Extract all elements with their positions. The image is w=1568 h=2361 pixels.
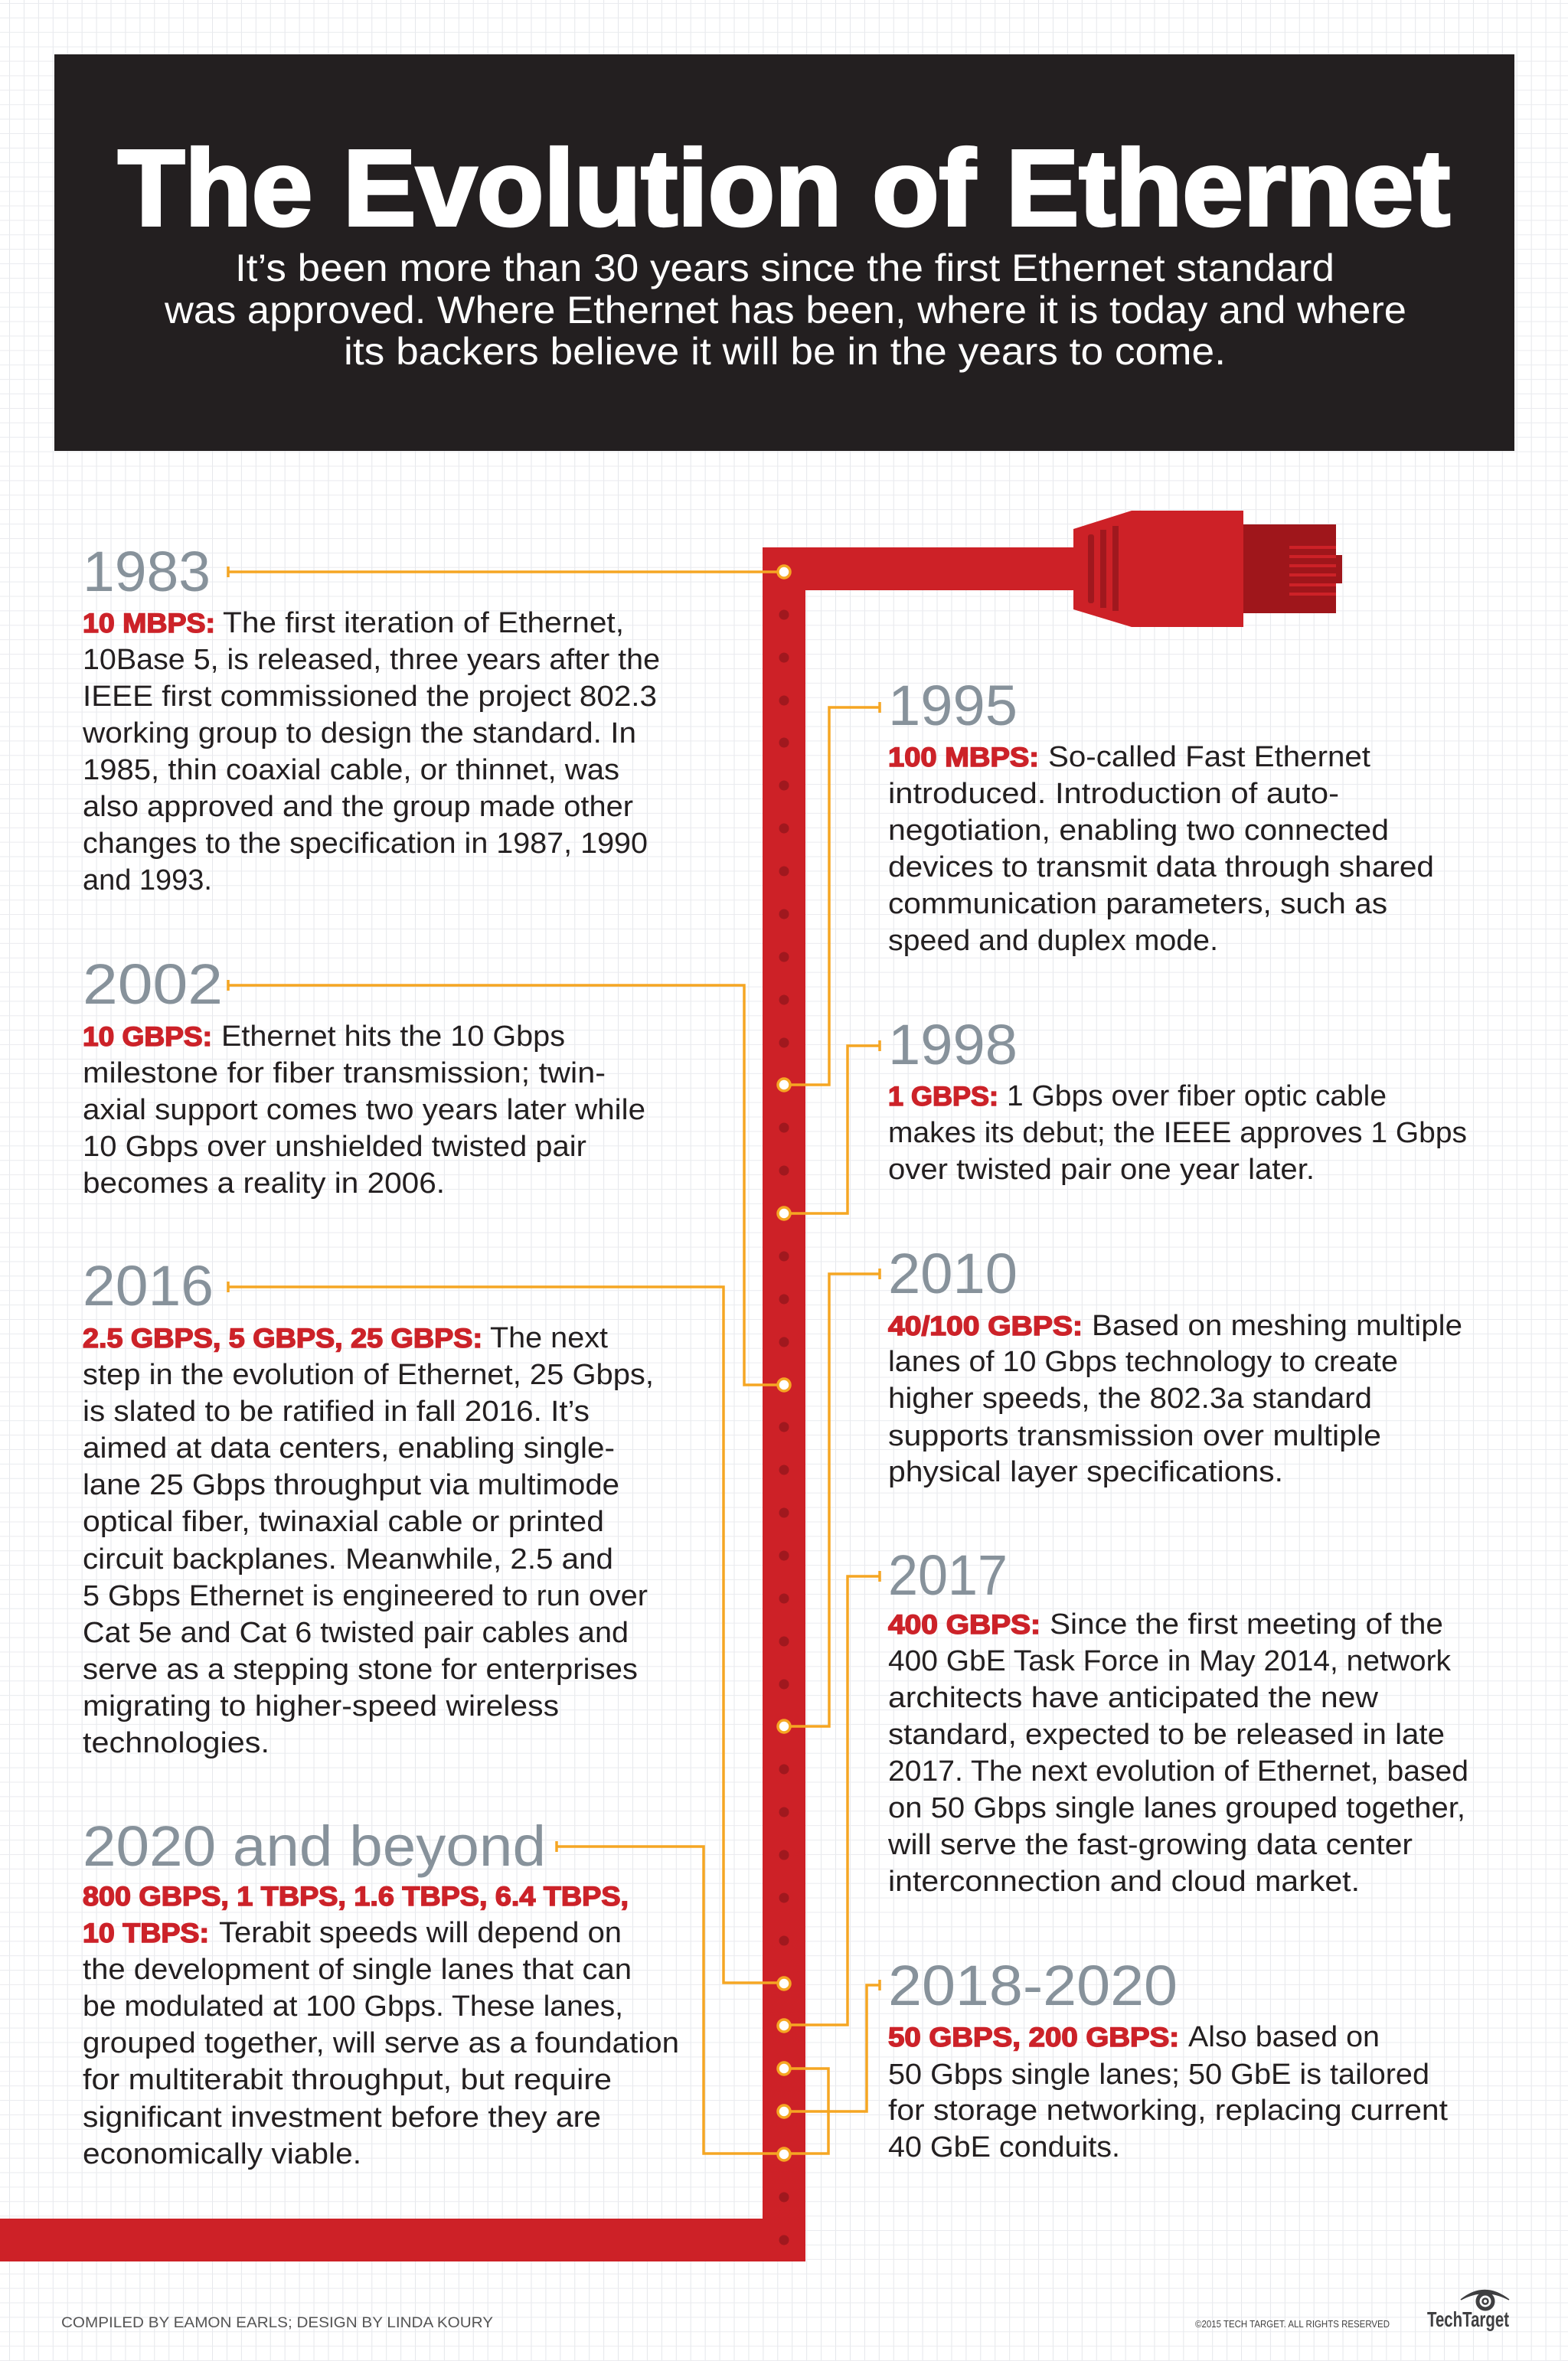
text block: 2016: 2.5 GBPS, 5 GBPS, 25 GBPS: [83,1324,482,1354]
icon: eye [1461,2291,1509,2309]
panel: 2017 [887,1543,1468,1898]
text block: 2016: optical fiber, twinaxial cable or printed [83,1506,604,1538]
heading: 1995: 1995 [888,674,1018,737]
text block: 2020 and beyond: 10 TBPS: [83,1919,209,1948]
heading: 2020 and beyond: 2020 and beyond [83,1814,546,1878]
text block: 1995: So-called Fast Ethernet [1048,741,1370,773]
text block: 2017: 400 GBPS: [888,1610,1040,1640]
text block: 2016: circuit backplanes. Meanwhile, 2.5 and [83,1543,613,1576]
text block: 1995: devices to transmit data through shared [888,851,1434,883]
text block: 2002: 10 Gbps over unshielded twisted pair [83,1131,586,1163]
text block: 2020 and beyond: for multiterabit throughput, but require [83,2064,612,2096]
text block: 2017: 400 GbE Task Force in May 2014, network [888,1645,1452,1677]
cable dots [779,609,789,2245]
text block: 2016: serve as a stepping stone for enterprises [83,1654,638,1686]
text block: 1983: 1985, thin coaxial cable, or thinnet, was [83,754,619,786]
footer credit: COMPILED BY EAMON EARLS; DESIGN BY LINDA KOURY [61,2314,493,2331]
text block: 2016: migrating to higher-speed wireless [83,1690,559,1723]
text block: 2010: Based on meshing multiple [1092,1310,1462,1342]
text block: 2010: supports transmission over multiple [888,1420,1381,1452]
text block: 2018-2020: 40 GbE conduits. [888,2131,1120,2163]
text block: 2016: The next [490,1322,608,1354]
connector lines [228,567,880,2154]
text block: 2016: aimed at data centers, enabling single- [83,1432,615,1465]
text block: 2020 and beyond: significant investment before they are [83,2101,601,2134]
heading: 2002: 2002 [83,952,223,1016]
text block: 2016: lane 25 Gbps throughput via multimode [83,1469,619,1501]
text block: 1995: communication parameters, such as [888,888,1387,920]
text block: 2018-2020: for storage networking, replacing current [888,2095,1448,2127]
text block: 1983: changes to the specification in 1987, 1990 [83,828,648,860]
panel: 2016 [83,1254,654,1759]
text block: 2002: Ethernet hits the 10 Gbps [221,1020,565,1053]
title: The Evolution of Ethernet [118,127,1450,248]
subtitle: was approved. Where Ethernet has been, where it is today and where [164,289,1406,331]
text block: 1998 [888,1080,1467,1186]
header banner [54,54,1514,451]
text block: 1983 [82,607,660,896]
text block: 2017: will serve the fast-growing data center [887,1829,1413,1861]
text block: 1995: speed and duplex mode. [888,925,1218,957]
copyright: ©2015 TECH TARGET. ALL RIGHTS RESERVED [1195,2319,1390,2330]
text block: 2016: is slated to be ratified in fall 2016. It’s [83,1396,590,1428]
heading: 1983: 1983 [83,540,211,603]
text block: 2016: technologies. [83,1727,270,1759]
text block: 2020 and beyond: 800 GBPS, 1 TBPS, 1.6 TBPS, 6.4 TBPS, [83,1882,629,1912]
icon: RJ45 plug [1073,511,1342,627]
text block: 2002: milestone for fiber transmission; twin- [83,1057,606,1089]
text block: 1998: 1 GBPS: [888,1082,998,1112]
panel: 2002 [83,952,645,1200]
panel: 1998 [888,1013,1467,1186]
text block: 2017: interconnection and cloud market. [888,1866,1360,1898]
text block: 1998: over twisted pair one year later. [888,1154,1315,1186]
text block: 1983: 10 MBPS: [83,609,215,638]
heading: 1998: 1998 [888,1013,1018,1076]
text block: 2018-2020: 50 Gbps single lanes; 50 GbE is tailored [888,2059,1429,2091]
subtitle: It’s been more than 30 years since the first Ethernet standard [235,247,1334,289]
panel: 1983 [82,540,660,896]
text block: 2020 and beyond: be modulated at 100 Gbps. These lanes, [83,1990,623,2023]
heading: 2017: 2017 [888,1543,1008,1607]
connector nodes [778,566,790,2160]
text block: 1998: makes its debut; the IEEE approves 1 Gbps [888,1117,1467,1149]
panel: 2018-2020 [888,1954,1448,2163]
text block: 2010: 40/100 GBPS: [888,1311,1083,1341]
text block: 1983: also approved and the group made other [83,791,633,823]
TechTarget logo [1427,2291,1509,2331]
text block: 1995 [888,741,1434,957]
text block: 2018-2020 [888,2021,1448,2163]
subtitle: its backers believe it will be in the years to come. [344,330,1226,373]
text block: 2016: step in the evolution of Ethernet, 25 Gbps, [83,1359,654,1391]
text block: 2020 and beyond: the development of single lanes that can [83,1954,632,1986]
text block: 2016: Cat 5e and Cat 6 twisted pair cables and [83,1617,629,1649]
text block: 1995: introduced. Introduction of auto- [888,778,1339,810]
text block: 1983: and 1993. [83,864,212,896]
text block: 1998: 1 Gbps over fiber optic cable [1007,1080,1387,1112]
text block: 1983: The first iteration of Ethernet, [223,607,624,639]
text block: 2002: axial support comes two years later while [83,1094,645,1126]
text block: 1995: 100 MBPS: [888,743,1039,772]
TechTarget logo: TechTarget [1427,2307,1509,2331]
text block: 2018-2020: Also based on [1188,2021,1380,2053]
text block: 2017: architects have anticipated the new [888,1682,1379,1714]
text block: 2010: higher speeds, the 802.3a standard [888,1383,1372,1415]
text block: 1983: IEEE first commissioned the project 802.3 [83,681,657,713]
text block: 2017: on 50 Gbps single lanes grouped together, [888,1792,1465,1824]
heading: 2010: 2010 [888,1242,1018,1305]
panel: 2020 and beyond [83,1814,679,2170]
text block: 2020 and beyond: grouped together, will serve as a foundation [83,2027,679,2059]
ethernet cable [0,547,1076,2261]
text block: 2010 [888,1310,1462,1488]
text block: 2002: becomes a reality in 2006. [83,1167,445,1200]
heading: 2016: 2016 [83,1254,214,1318]
text block: 2002 [83,1020,645,1200]
text block: 2016 [83,1322,654,1759]
panel: 2010 [888,1242,1462,1488]
text block: 1983: 10Base 5, is released, three years after the [83,644,660,676]
text block: 2017: 2017. The next evolution of Ethernet, based [888,1755,1468,1788]
text block: 2010: lanes of 10 Gbps technology to create [888,1346,1398,1378]
text block: 1983: working group to design the standard. In [82,717,636,749]
text block: 2018-2020: 50 GBPS, 200 GBPS: [888,2023,1179,2052]
text block: 2002: 10 GBPS: [83,1022,212,1052]
text block: 2020 and beyond: economically viable. [83,2138,361,2170]
text block: 2020 and beyond [83,1882,679,2170]
panel: 1995 [888,674,1434,957]
text block: 2017: standard, expected to be released in late [888,1719,1445,1751]
heading: 2018-2020: 2018-2020 [888,1954,1178,2017]
text block: 2010: physical layer specifications. [888,1456,1283,1488]
text block: 1995: negotiation, enabling two connected [888,815,1389,847]
text block: 2020 and beyond: Terabit speeds will depend on [219,1917,622,1949]
text block: 2017: Since the first meeting of the [1050,1608,1443,1641]
text block: 2016: 5 Gbps Ethernet is engineered to run over [83,1580,648,1612]
subtitle [164,247,1406,373]
text block: 2017 [887,1608,1468,1898]
